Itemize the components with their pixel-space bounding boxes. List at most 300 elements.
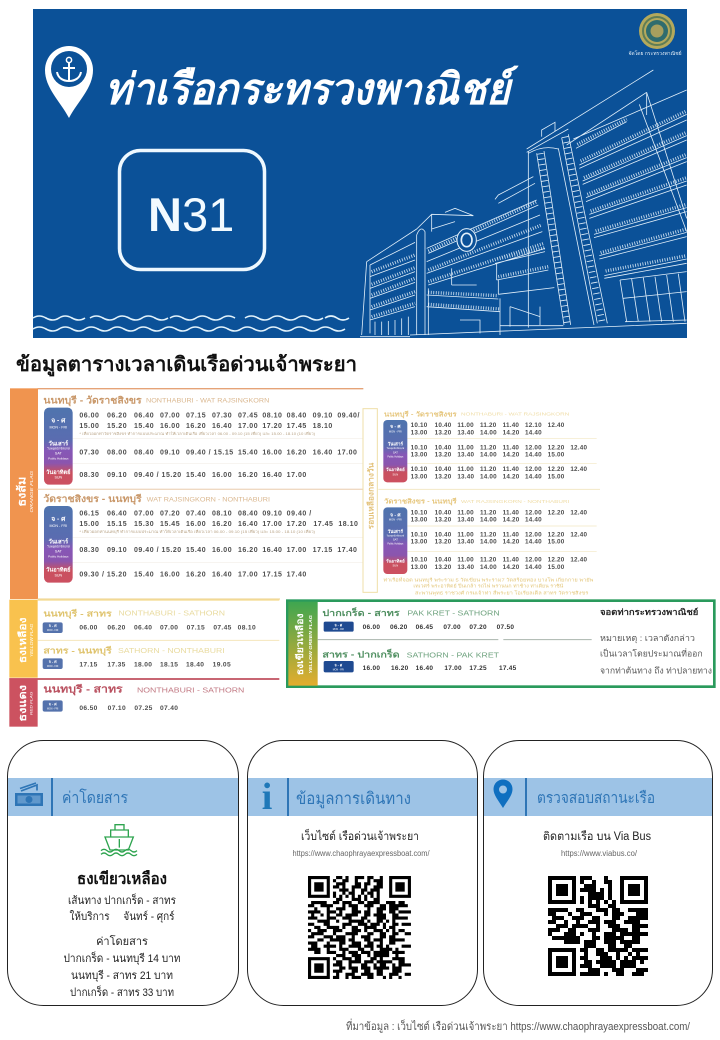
times: Nonthaburi to Wat Rajsingkorn: 16.20	[186, 423, 206, 430]
route heading: PAK KRET - SATHORN	[407, 609, 500, 618]
midday times inbound: 12.40	[570, 531, 587, 538]
midday times outbound: 11.20	[480, 466, 497, 473]
times: Nonthaburi to Wat Rajsingkorn: 16.20	[238, 472, 258, 479]
day label: จ - ศ	[334, 662, 343, 667]
times: Wat Rajsingkorn to Nonthaburi: 09.30 / 15.20	[79, 572, 127, 579]
midday times inbound: 12.40	[570, 509, 587, 516]
midday times outbound: 13.20	[435, 429, 452, 436]
midday times outbound: 12.40	[548, 422, 565, 429]
midday times outbound: 14.00	[480, 452, 497, 459]
pier note: หมายเหตุ : เวลาดังกล่าว	[600, 633, 695, 644]
times: 06.00	[363, 624, 380, 631]
midday times inbound: 13.40	[457, 517, 474, 524]
midday times inbound: 12.20	[548, 557, 565, 564]
route heading	[43, 646, 225, 657]
times: 06.20	[107, 625, 126, 632]
times: 16.40	[416, 665, 433, 672]
midday times outbound: 12.20	[548, 466, 565, 473]
times: Nonthaburi to Wat Rajsingkorn: 08.40	[287, 413, 307, 420]
day labels: Public Holidays	[387, 456, 404, 458]
midday times inbound: 13.00	[411, 539, 428, 546]
midday times outbound: 10.10	[411, 444, 428, 451]
times: 07.15	[187, 625, 205, 632]
midday times inbound	[411, 509, 587, 571]
day labels: จ - ศ	[51, 418, 66, 425]
midday times outbound: 12.20	[548, 444, 565, 451]
yellow flag side tab	[9, 600, 38, 678]
times: 17.25	[469, 665, 487, 672]
midday times inbound: 13.40	[457, 564, 474, 571]
panel: red flag	[9, 678, 279, 727]
times: Wat Rajsingkorn to Nonthaburi: 06.15	[79, 511, 99, 518]
times: 17.45	[499, 665, 517, 672]
midday times outbound	[411, 422, 587, 480]
day labels: SUN	[54, 574, 63, 578]
midday times inbound: 14.00	[480, 517, 497, 524]
pier note: จากท่าต้นทาง ถึง ท่าปลายทาง	[600, 666, 712, 676]
times: 07.50	[497, 624, 514, 631]
midday times outbound: 10.40	[435, 444, 452, 451]
midday times inbound: 14.20	[503, 564, 520, 571]
midday times inbound: 14.20	[503, 517, 520, 524]
website label: เว็บไซต์ เรือด่วนเจ้าพระยา	[301, 828, 419, 843]
day labels: จ - ศ	[51, 516, 66, 523]
card heading: ข้อมูลการเดินทาง	[296, 790, 411, 809]
times: 07.10	[108, 705, 126, 712]
midday times outbound: 15.00	[548, 452, 565, 459]
midday times outbound: 13.20	[435, 452, 452, 459]
day label: MON - FRI	[333, 669, 344, 671]
midday times inbound: 12.00	[525, 531, 542, 538]
times: Nonthaburi to Wat Rajsingkorn: 15.20	[107, 423, 127, 430]
day labels: SUN	[393, 564, 398, 568]
times: Nonthaburi to Wat Rajsingkorn: 07.45	[238, 413, 258, 420]
day label	[43, 658, 63, 669]
midday times inbound: 11.20	[480, 531, 497, 538]
times: Nonthaburi to Wat Rajsingkorn: 09.10	[313, 413, 333, 420]
day label	[324, 622, 354, 632]
times: Wat Rajsingkorn to Nonthaburi: 16.00	[160, 572, 180, 579]
day labels: MON - FRI	[389, 518, 402, 522]
midday times inbound: 11.00	[457, 557, 474, 564]
times: 17.35	[107, 662, 126, 669]
route heading: Nonthaburi to Wat Rajsingkorn: นนทบุรี - วัดราชสิงขร	[43, 394, 143, 406]
midday times outbound: 10.40	[435, 422, 452, 429]
route heading: นนทบุรี - สาทร	[43, 608, 112, 619]
midday times inbound: 14.40	[525, 517, 542, 524]
route heading: NONTHABURI - SATHORN	[137, 685, 244, 694]
route heading: สาทร - นนทบุรี	[43, 646, 112, 657]
times: 16.00	[363, 665, 380, 672]
midday times outbound: 13.40	[457, 429, 474, 436]
route heading	[43, 608, 225, 619]
midday times inbound: 10.10	[411, 509, 428, 516]
midday times inbound: 11.00	[457, 531, 474, 538]
fare details: ธงเขียวเหลือง	[77, 869, 167, 888]
times: Nonthaburi to Wat Rajsingkorn: 07.15	[186, 413, 206, 420]
route heading	[322, 648, 500, 660]
orange flag side tab	[10, 388, 38, 599]
day labels: SAT	[393, 450, 398, 454]
midday times inbound: 12.20	[548, 531, 565, 538]
times: Nonthaburi to Wat Rajsingkorn: 08.30	[79, 472, 99, 479]
route heading	[384, 498, 569, 506]
times: 18.40	[186, 662, 204, 669]
times: Nonthaburi to Wat Rajsingkorn: 17.00	[238, 423, 258, 430]
midday times inbound: 11.00	[457, 509, 474, 516]
day labels	[44, 506, 73, 583]
times: Wat Rajsingkorn to Nonthaburi: 17.15	[313, 547, 333, 554]
midday times outbound: 14.20	[503, 452, 520, 459]
times: Wat Rajsingkorn to Nonthaburi: 15.40	[134, 572, 154, 579]
times: Wat Rajsingkorn to Nonthaburi: 09.40 / 15.20	[134, 547, 182, 554]
day labels: Public Holidays	[48, 554, 69, 558]
yellow green side tab: YELLOW GREEN FLAG	[308, 615, 313, 673]
ministry seal	[628, 13, 682, 57]
midday times outbound: 10.10	[411, 466, 428, 473]
times: Wat Rajsingkorn to Nonthaburi: 16.40	[238, 521, 258, 528]
midday times inbound: 10.40	[435, 557, 452, 564]
icon: anchor location pin	[45, 46, 93, 118]
route heading: Wat Rajsingkorn to Nonthaburi: WAT RAJSINGKORN - NONTHABURI	[147, 496, 270, 503]
day labels: Public Holidays	[387, 544, 404, 546]
times: Nonthaburi to Wat Rajsingkorn: 18.10	[313, 423, 333, 430]
times: Wat Rajsingkorn to Nonthaburi: 16.20	[212, 521, 232, 528]
panel: orange flag	[10, 388, 363, 599]
route heading: Nonthaburi to Wat Rajsingkorn	[43, 394, 270, 406]
midday side tab: รอบเหลืองกลางวัน	[366, 462, 376, 529]
times: Nonthaburi to Wat Rajsingkorn: 09.10	[107, 472, 127, 479]
times: 07.00	[160, 625, 178, 632]
route heading	[322, 606, 500, 618]
times: Nonthaburi to Wat Rajsingkorn: 07.30	[79, 450, 99, 457]
route heading: สาทร - ปากเกร็ด	[322, 648, 400, 660]
day label: MON - FRI	[47, 708, 59, 710]
day label: MON - FRI	[47, 630, 59, 632]
panel: midday yellow round	[363, 409, 600, 596]
times: Nonthaburi to Wat Rajsingkorn: 15.00	[79, 423, 99, 430]
midday times outbound: 11.40	[503, 466, 519, 473]
times: Nonthaburi to Wat Rajsingkorn: 16.00	[212, 472, 232, 479]
times: Nonthaburi to Wat Rajsingkorn: * เที่ยวออกท่าวัดราชสิงขร ทำการแบบประมาณ ทำให้เวลาเดินเรือ เที่ยวเวลา 06.00 - 09.10 (15 เที่ยว) และ 15.00 - 18.10 (10 เที่ยว)	[79, 431, 315, 436]
midday times outbound: 11.40	[503, 422, 519, 429]
day label: จ - ศ	[49, 623, 57, 628]
pier code box	[120, 150, 264, 270]
times: Wat Rajsingkorn to Nonthaburi: 15.30	[134, 521, 154, 528]
day label	[43, 700, 63, 712]
midday times inbound: 10.10	[411, 557, 428, 564]
times: Wat Rajsingkorn to Nonthaburi: 07.40	[186, 511, 206, 518]
times: Nonthaburi to Wat Rajsingkorn: 06.00	[79, 413, 99, 420]
midday times inbound: 10.40	[435, 531, 452, 538]
midday times inbound: 15.00	[548, 564, 565, 571]
card heading: ค่าโดยสาร	[62, 788, 128, 807]
day labels: วันเสาร์	[388, 528, 403, 534]
day labels: วันหยุดนักขัตฤกษ์	[47, 544, 70, 549]
times: 17.15	[79, 662, 98, 669]
times: Nonthaburi to Wat Rajsingkorn: 16.40	[313, 450, 333, 457]
waves	[33, 316, 349, 331]
day labels: MON - FRI	[49, 524, 67, 528]
times: Nonthaburi to Wat Rajsingkorn: 16.00	[160, 423, 180, 430]
times: Wat Rajsingkorn to Nonthaburi: 09.10	[262, 511, 282, 518]
midday times inbound: 13.20	[435, 539, 452, 546]
times: 16.20	[391, 665, 409, 672]
midday times outbound: 13.00	[411, 473, 428, 480]
day labels: วันอาทิตย์	[386, 557, 405, 563]
route heading	[43, 684, 244, 696]
midday times inbound: 10.10	[411, 531, 428, 538]
day labels: วันหยุดนักขัตฤกษ์	[386, 447, 405, 451]
day labels: จ - ศ	[390, 512, 401, 518]
day labels: วันหยุดนักขัตฤกษ์	[47, 446, 70, 451]
midday times outbound: 14.40	[525, 452, 542, 459]
times: Nonthaburi to Wat Rajsingkorn: 07.00	[160, 413, 180, 420]
fare details: นนทบุรี - สาทร 21 บาท	[71, 969, 173, 982]
yellow green side tab: ธงเขียวเหลือง	[294, 613, 305, 675]
times: Nonthaburi to Wat Rajsingkorn: 07.30	[212, 413, 232, 420]
times: Nonthaburi to Wat Rajsingkorn: 15.40	[238, 450, 258, 457]
midday times outbound: 11.40	[503, 444, 519, 451]
midday times inbound: 14.20	[503, 539, 520, 546]
route heading: ปากเกร็ด - สาทร	[322, 606, 400, 618]
times: Wat Rajsingkorn to Nonthaburi: 17.00	[238, 572, 258, 579]
panel: yellow flag	[9, 600, 279, 678]
times: Wat Rajsingkorn to Nonthaburi: 17.40	[287, 572, 307, 579]
orange flag side tab: ORANGE FLAG	[29, 471, 35, 512]
times: Nonthaburi to Wat Rajsingkorn: 09.10	[160, 450, 180, 457]
times: Nonthaburi to Wat Rajsingkorn: 09.40/	[337, 413, 360, 420]
midday stops note: สะพานพุทธ ราชวงศ์ กรมเจ้าท่า สี่พระยา โอเรียลเต็ล สาทร วัดราชสิงขร	[415, 588, 589, 596]
route heading: NONTHABURI - SATHORN	[118, 611, 225, 618]
route heading	[384, 410, 570, 418]
day labels	[383, 420, 407, 482]
day labels: วันเสาร์	[48, 537, 69, 545]
card: travel info	[248, 740, 478, 1006]
ministry seal: จัดโดย กระทรวงพาณิชย์	[628, 50, 682, 57]
card heading: ตรวจสอบสถานะเรือ	[537, 789, 655, 807]
midday stops note: เทเวศร์ พระอาทิตย์ ปิ่นเกล้า รถไฟ พรานนก ท่าช้าง ท่าเตียน ราชินี	[413, 583, 564, 589]
midday times outbound: 11.20	[480, 444, 497, 451]
pier code box: N31	[148, 188, 234, 241]
route heading: SATHORN - NONTHABURI	[118, 648, 225, 655]
midday times inbound: 13.20	[435, 517, 452, 524]
midday times inbound: 11.40	[503, 557, 519, 564]
midday times outbound: 11.00	[457, 444, 474, 451]
times: 06.45	[416, 624, 433, 631]
fare details: ปากเกร็ด - นนทบุรี 14 บาท	[64, 951, 180, 965]
times: 06.50	[79, 705, 98, 712]
card: fares	[8, 740, 238, 1006]
midday times outbound: 13.20	[435, 473, 452, 480]
times: Nonthaburi to Wat Rajsingkorn: 06.40	[134, 413, 154, 420]
route heading: นนทบุรี - สาทร	[43, 684, 123, 696]
icon: banknotes	[15, 783, 43, 806]
day labels: วันเสาร์	[48, 439, 69, 447]
day labels: Public Holidays	[48, 456, 69, 460]
times: Nonthaburi to Wat Rajsingkorn: 17.45	[287, 423, 307, 430]
midday times outbound: 12.40	[570, 444, 587, 451]
QR code: via bus	[548, 876, 648, 976]
midday times outbound: 13.40	[457, 473, 474, 480]
route heading: Nonthaburi to Wat Rajsingkorn: NONTHABURI - WAT RAJSINGKORN	[146, 398, 270, 405]
times: Wat Rajsingkorn to Nonthaburi: 08.40	[238, 511, 258, 518]
midday times outbound: 13.00	[411, 429, 428, 436]
red flag side tab: RED FLAG	[29, 692, 34, 715]
times: Nonthaburi to Wat Rajsingkorn: 16.40	[262, 472, 282, 479]
times: Nonthaburi to Wat Rajsingkorn: 09.40 / 15.15	[186, 450, 234, 457]
midday times outbound: 10.10	[411, 422, 428, 429]
pier note: จอดท่ากระทรวงพาณิชย์	[600, 607, 698, 617]
midday times outbound: 14.40	[525, 473, 542, 480]
day labels: วันอาทิตย์	[46, 468, 71, 476]
times: Nonthaburi to Wat Rajsingkorn: 15.40	[186, 472, 206, 479]
midday times outbound: 11.20	[480, 422, 497, 429]
times: Wat Rajsingkorn to Nonthaburi: 15.40	[186, 547, 206, 554]
times: Wat Rajsingkorn to Nonthaburi: 17.15	[262, 572, 282, 579]
times: Wat Rajsingkorn to Nonthaburi: 17.00	[287, 547, 307, 554]
midday stops note: ท่าเรือที่จอด นนทบุรี พระราม 5 วัดเขียน พระราม7 วัดสร้อยทอง บางโพ เกียกกาย พายัพ	[383, 576, 593, 583]
times: Wat Rajsingkorn to Nonthaburi: 15.45	[160, 521, 180, 528]
midday stops note	[383, 576, 593, 596]
building line art	[360, 70, 687, 337]
day labels: SUN	[393, 472, 398, 476]
midday times inbound: 15.00	[548, 539, 565, 546]
times: 07.20	[469, 624, 487, 631]
red flag side tab: ธงแดง	[18, 685, 29, 722]
times: Nonthaburi to Wat Rajsingkorn: 08.40	[134, 450, 154, 457]
midday times inbound: 12.40	[570, 557, 587, 564]
midday times outbound: 14.00	[480, 473, 497, 480]
day label: MON - FRI	[47, 666, 59, 668]
times: Nonthaburi to Wat Rajsingkorn: 08.10	[262, 413, 282, 420]
day label: จ - ศ	[334, 622, 343, 627]
day labels: SAT	[55, 550, 63, 554]
times: Wat Rajsingkorn to Nonthaburi: 07.20	[160, 511, 180, 518]
day label: จ - ศ	[49, 659, 57, 664]
times: 07.00	[443, 624, 461, 631]
day labels: MON - FRI	[389, 429, 402, 433]
times: 17.00	[444, 665, 462, 672]
midday times inbound: 12.20	[548, 509, 565, 516]
times: 19.05	[213, 662, 231, 669]
times: 07.25	[134, 705, 153, 712]
banner	[33, 9, 687, 338]
midday times inbound: 14.00	[480, 539, 497, 546]
day label	[43, 622, 63, 633]
fare details: ปากเกร็ด - สาทร 33 บาท	[70, 985, 174, 999]
route heading: Wat Rajsingkorn to Nonthaburi	[43, 493, 270, 505]
times: Wat Rajsingkorn to Nonthaburi: 16.20	[238, 547, 258, 554]
day labels: วันอาทิตย์	[386, 466, 405, 472]
midday times outbound: 13.00	[411, 452, 428, 459]
times: Wat Rajsingkorn to Nonthaburi: 16.40	[212, 572, 232, 579]
midday times outbound: 12.10	[525, 422, 542, 429]
times: Wat Rajsingkorn to Nonthaburi: 16.00	[212, 547, 232, 554]
fare details	[64, 869, 180, 999]
icon: ship	[101, 825, 137, 856]
times: Wat Rajsingkorn to Nonthaburi	[79, 511, 358, 579]
midday times outbound: 15.00	[548, 473, 565, 480]
day labels: SUN	[54, 476, 63, 480]
midday times outbound: 12.00	[525, 466, 542, 473]
times: Wat Rajsingkorn to Nonthaburi: * เที่ยวออกท่านนทบุรี ทำการแบบประมาณ ทำให้เวลาเดินเรือ เที่ยวเวลา 06.00 - 09.10 (15 เที่ยว) และ 15.00 - 18.10 (10 เที่ยว)	[79, 529, 315, 535]
day label	[324, 661, 354, 672]
day labels: วันอาทิตย์	[46, 566, 71, 574]
times: 06.20	[390, 624, 408, 631]
times: Nonthaburi to Wat Rajsingkorn: 17.20	[262, 423, 282, 430]
times: Wat Rajsingkorn to Nonthaburi: 17.20	[287, 521, 307, 528]
midday times inbound: 13.20	[435, 564, 452, 571]
midday times outbound: 13.40	[457, 452, 474, 459]
midday times inbound: 13.00	[411, 564, 428, 571]
midday times inbound: 12.00	[525, 557, 542, 564]
midday times inbound: 13.00	[411, 517, 428, 524]
times: Nonthaburi to Wat Rajsingkorn: 16.20	[287, 450, 307, 457]
times: Wat Rajsingkorn to Nonthaburi: 06.40	[107, 511, 127, 518]
times: Wat Rajsingkorn to Nonthaburi: 16.20	[186, 572, 206, 579]
icon: location pin	[494, 780, 512, 808]
banner title: ท่าเรือกระทรวงพาณิชย์	[105, 65, 519, 114]
route heading: WAT RAJSINGKORN - NONTHABURI	[461, 499, 569, 505]
times: Nonthaburi to Wat Rajsingkorn: 16.00	[262, 450, 282, 457]
yellow flag side tab: YELLOW FLAG	[29, 623, 34, 657]
via bus url: https://www.viabus.co/	[561, 849, 638, 858]
times: Wat Rajsingkorn to Nonthaburi: 17.00	[262, 521, 282, 528]
midday times outbound: 14.20	[503, 473, 520, 480]
times: Wat Rajsingkorn to Nonthaburi: 17.40	[337, 547, 357, 554]
fare details: ค่าโดยสาร	[96, 934, 148, 948]
times: Wat Rajsingkorn to Nonthaburi: 15.00	[79, 521, 99, 528]
route heading: นนทบุรี - วัดราชสิงขร	[384, 410, 457, 418]
day labels	[383, 507, 407, 574]
times: Nonthaburi to Wat Rajsingkorn: 09.40 / 15.20	[134, 472, 182, 479]
midday times outbound: 12.00	[525, 444, 542, 451]
times: Nonthaburi to Wat Rajsingkorn: 17.00	[337, 450, 357, 457]
times: Wat Rajsingkorn to Nonthaburi: 17.45	[313, 521, 333, 528]
route heading: SATHORN - PAK KRET	[407, 650, 500, 659]
times: Nonthaburi to Wat Rajsingkorn: 15.40	[134, 423, 154, 430]
midday side tab	[363, 409, 377, 592]
day labels: วันเสาร์	[388, 441, 403, 447]
times: 06.00	[79, 625, 98, 632]
route heading: NONTHABURI - WAT RAJSINGKORN	[461, 412, 570, 418]
times: Nonthaburi to Wat Rajsingkorn	[79, 413, 360, 479]
card: boat status	[484, 740, 712, 1006]
times: 06.40	[134, 625, 152, 632]
day label: จ - ศ	[49, 701, 57, 706]
website url: https://www.chaophrayaexpressboat.com/	[292, 849, 430, 858]
route heading: Wat Rajsingkorn to Nonthaburi: วัดราชสิงขร - นนทบุรี	[43, 493, 143, 505]
day labels: MON - FRI	[49, 426, 67, 430]
midday times inbound: 11.40	[503, 531, 519, 538]
times: Wat Rajsingkorn to Nonthaburi: 15.15	[107, 521, 127, 528]
times: Nonthaburi to Wat Rajsingkorn: 06.20	[107, 413, 127, 420]
times: Wat Rajsingkorn to Nonthaburi: 07.00	[134, 511, 154, 518]
icon: info: i	[262, 776, 272, 818]
fare details: เส้นทาง ปากเกร็ด - สาทร	[68, 893, 176, 907]
times: 07.40	[160, 705, 178, 712]
day labels: SAT	[393, 538, 398, 542]
midday times inbound: 11.20	[480, 557, 497, 564]
heading: ferry timetable: ข้อมูลตารางเวลาเดินเรือด่วนเจ้าพระยา	[16, 353, 357, 378]
midday times outbound: 10.40	[435, 466, 452, 473]
pier note: เป็นเวลาโดยประมาณที่ออก	[600, 648, 703, 659]
times: 18.00	[134, 662, 152, 669]
day label: MON - FRI	[333, 629, 344, 631]
midday times outbound: 14.00	[480, 429, 497, 436]
times: Nonthaburi to Wat Rajsingkorn: 17.00	[287, 472, 307, 479]
